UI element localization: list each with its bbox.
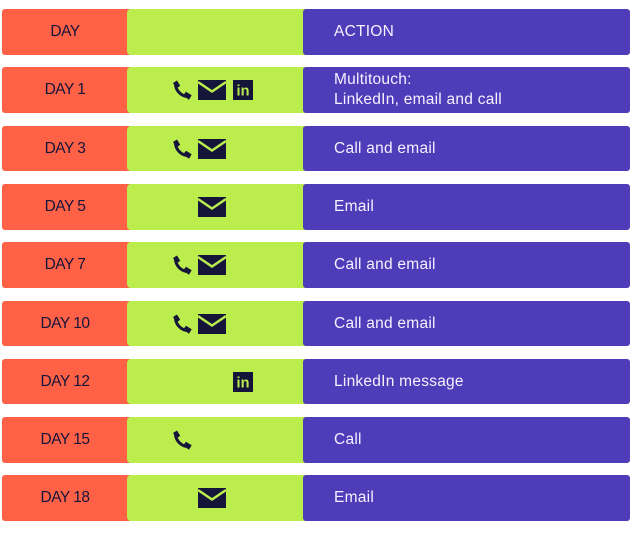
channel icons (127, 359, 307, 404)
day label (2, 300, 132, 346)
action text: Multitouch: (334, 71, 412, 88)
channel icons (127, 126, 307, 171)
row: day 3 (2, 126, 630, 171)
icon: email (198, 139, 226, 159)
day label (2, 126, 132, 171)
channel icons (127, 67, 307, 113)
day label: DAY 10 (40, 314, 90, 332)
channel icons (127, 242, 307, 288)
icon: linkedin (233, 80, 253, 100)
action text: LinkedIn, email and call (334, 91, 502, 108)
day label: DAY 5 (45, 198, 85, 215)
header row (2, 9, 630, 55)
action header (303, 9, 630, 54)
action text (303, 300, 630, 346)
row: day 15 (2, 417, 630, 463)
day header: DAY (50, 23, 80, 40)
day label (2, 184, 132, 230)
action text: LinkedIn message (334, 373, 464, 390)
icon: linkedin: in (237, 84, 249, 100)
channel icons (127, 475, 307, 521)
day label (2, 417, 132, 462)
channel icons (127, 417, 307, 462)
day label: DAY 7 (45, 256, 85, 273)
action text (303, 126, 630, 171)
icon: phone (173, 430, 192, 450)
action text: Call and email (334, 140, 436, 157)
action text: Email (334, 489, 374, 506)
channel icons (127, 300, 307, 346)
action text (303, 359, 630, 404)
action text (303, 475, 630, 521)
row: day 18 (2, 475, 630, 521)
action text: Email (334, 198, 374, 215)
icon: linkedin: in (237, 375, 249, 391)
day label: DAY 12 (40, 373, 90, 390)
channel icons (127, 184, 307, 230)
row: day 1 (2, 67, 630, 113)
action text: Call and email (334, 314, 436, 332)
row: day 7 (2, 242, 630, 288)
day label: DAY 3 (45, 140, 85, 157)
icon: linkedin (233, 372, 253, 392)
row: day 10 (2, 301, 630, 346)
row: day 5 (2, 184, 630, 230)
row: day 12 (2, 359, 630, 404)
icon: phone (173, 80, 192, 100)
day label: DAY 15 (40, 431, 90, 448)
day label (2, 475, 132, 521)
day label (2, 242, 132, 288)
icon: phone (173, 314, 192, 334)
icon: phone (173, 140, 192, 159)
action text: Call (334, 431, 362, 448)
action text (303, 184, 630, 230)
action text: Call and email (334, 256, 436, 273)
icon: email (198, 255, 226, 275)
icon: email (198, 314, 226, 334)
icon: email (198, 197, 226, 217)
day header (2, 9, 132, 54)
day label: DAY 18 (40, 489, 90, 506)
icon: phone (173, 256, 192, 275)
action text (303, 417, 630, 462)
action header: ACTION (334, 23, 394, 40)
action text (303, 242, 630, 288)
action text (303, 67, 630, 113)
day label (2, 359, 132, 404)
icon column header (127, 9, 307, 54)
icon: email (198, 488, 226, 508)
day label: DAY 1 (45, 81, 85, 98)
icon: email (198, 80, 226, 100)
day label (2, 67, 132, 113)
